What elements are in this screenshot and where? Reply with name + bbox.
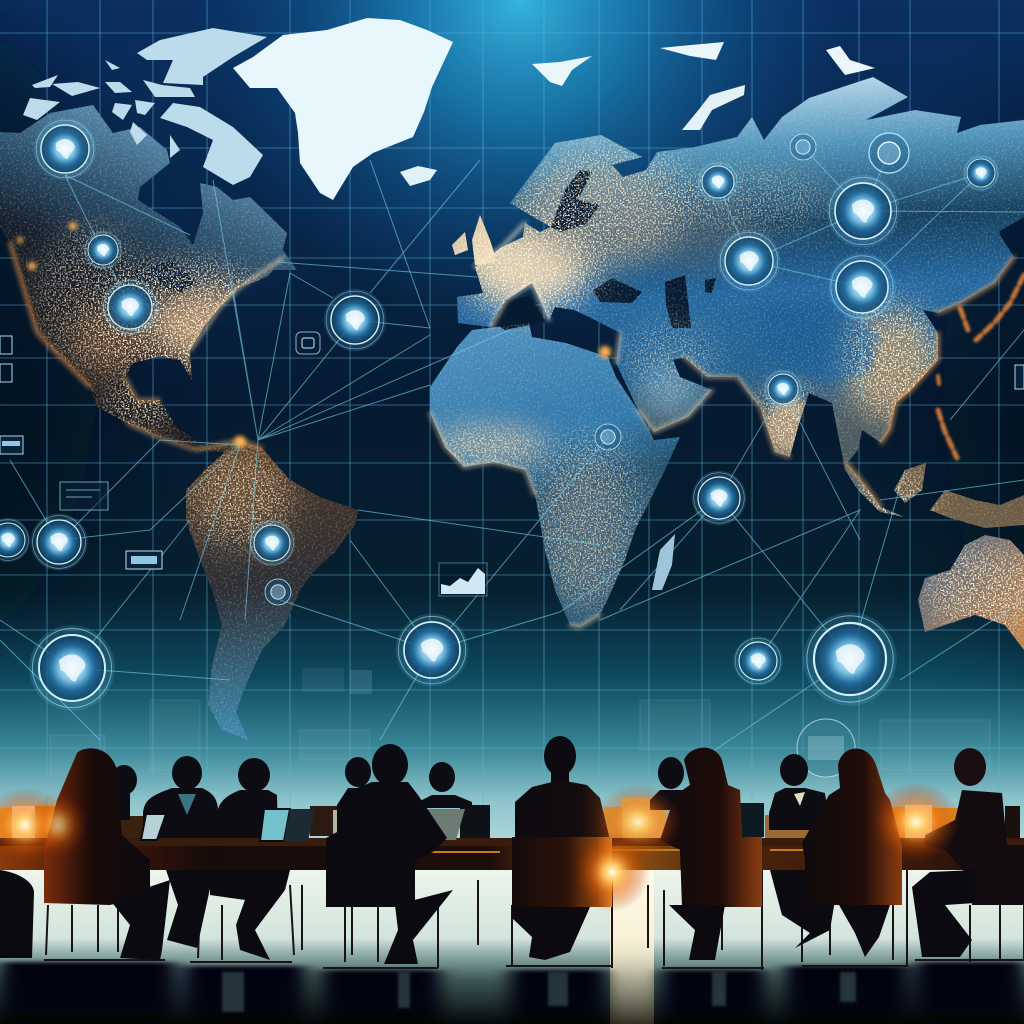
- person: woman left: [44, 748, 170, 960]
- Eurasia: [457, 77, 1024, 517]
- chair: far right pair: [802, 870, 1024, 966]
- laptop: orange folder: [176, 818, 213, 840]
- laptop: far right: [932, 808, 959, 840]
- laptop: brown right: [310, 806, 340, 836]
- Indonesia: [894, 463, 1024, 528]
- Franz Josef Land: [660, 42, 724, 60]
- laptop: right dark: [739, 803, 764, 837]
- person: man second left legs: [166, 870, 214, 948]
- table front: [0, 846, 1024, 870]
- lower wall faint diagrams: [50, 700, 990, 775]
- laptop: far left: [0, 808, 14, 841]
- glow: centre table flare: [574, 832, 650, 912]
- person: centre back large: [326, 744, 453, 964]
- laptop: tablet: [141, 814, 166, 840]
- Tibet dark blue patch: [755, 300, 880, 385]
- person: man right legs: [770, 870, 840, 948]
- node: Russia west: [697, 161, 739, 203]
- person: seated far left legs: [0, 870, 34, 958]
- node: Central Asia: [718, 230, 780, 292]
- laptop: right tan: [765, 815, 809, 840]
- node: Indian Ocean: [692, 471, 746, 525]
- glow: centre right: [594, 784, 682, 860]
- Madagascar: [652, 534, 675, 590]
- seated figures front row: [0, 736, 1024, 964]
- node: India: [764, 370, 802, 408]
- person: man far right: [912, 748, 1024, 957]
- laptop: dark centre back: [460, 805, 490, 838]
- person: facing centre: [418, 762, 472, 808]
- floor reflected streaks: [222, 972, 856, 1012]
- panel: right edge chart: [1015, 365, 1024, 389]
- Greenland: [233, 18, 453, 200]
- regional glows: [70, 160, 936, 600]
- node: lower right: [803, 612, 897, 706]
- globe nodes: [0, 118, 999, 777]
- city lights warm: [21, 135, 1024, 645]
- floor light beam: [610, 868, 654, 1024]
- person: small right back: [650, 757, 685, 810]
- glow: right: [872, 782, 960, 862]
- inland seas: [150, 170, 716, 330]
- laptop: far right dark: [1005, 806, 1020, 840]
- person: centre big back: [512, 736, 612, 960]
- network connection lines: [0, 147, 1024, 760]
- front laptop screens: [141, 809, 465, 841]
- city lights cool: [0, 78, 1024, 740]
- lit coastlines: [10, 223, 1014, 627]
- person: woman far right: [802, 748, 902, 957]
- panel: left edge chart: [0, 336, 12, 382]
- chair: right: [648, 870, 764, 970]
- person: man second left: [217, 758, 278, 840]
- person: small profile left: [110, 765, 137, 820]
- node: faint lower: [797, 719, 855, 777]
- Iceland: [400, 166, 437, 186]
- chair: far left: [44, 905, 165, 960]
- node: Canada: [84, 230, 122, 270]
- glow: far left: [0, 787, 67, 863]
- table edge highlight: [410, 850, 860, 852]
- node: Pacific: [30, 513, 88, 571]
- node: East Africa: [595, 424, 621, 450]
- table top: [0, 838, 1024, 848]
- node: Russia north: [790, 134, 816, 160]
- Severnaya Zemlya: [826, 46, 875, 75]
- node: Russia north east: [869, 133, 909, 173]
- panel: left edge bar: [0, 436, 23, 454]
- person: man suit left: [143, 756, 218, 845]
- node: USA: [101, 278, 159, 336]
- node: lower left: [29, 625, 115, 711]
- laptop: far right orange: [892, 807, 905, 840]
- laptop: centre grey: [427, 809, 465, 840]
- data panels: [0, 332, 1024, 694]
- chair: centre large: [323, 880, 478, 968]
- node: Alaska: [34, 118, 96, 180]
- laptop: left second: [35, 806, 60, 841]
- node: left edge: [0, 518, 30, 562]
- laptop: dark screen: [284, 809, 315, 841]
- panel: area chart: [439, 563, 487, 596]
- laptop: teal screen: [260, 809, 290, 841]
- Australia: [918, 535, 1024, 650]
- Japan and Korea bright coast: [938, 275, 1024, 458]
- person: man fourth legs: [210, 870, 290, 960]
- chair: centre big back: [506, 870, 612, 968]
- laptop: pale sliver: [333, 810, 346, 837]
- North America: [0, 105, 297, 452]
- Svalbard: [532, 56, 592, 86]
- laptop: gold glow: [604, 807, 622, 838]
- continents: [0, 0, 1024, 800]
- Novaya Zemlya: [682, 85, 745, 130]
- glow: left woman flare: [28, 791, 88, 859]
- Africa: [430, 323, 680, 627]
- back-lit wall and floor: [0, 868, 1024, 1024]
- panel: map inset: [296, 332, 320, 354]
- node: Far East: [963, 155, 999, 191]
- back-lighting glows: [0, 782, 960, 912]
- panel: left mini chart: [60, 482, 108, 510]
- node: China: [828, 253, 896, 321]
- node: Atlantic north: [324, 289, 386, 351]
- Mexico light hubs: [17, 222, 611, 448]
- chair: second: [190, 885, 302, 962]
- back-row laptops: [0, 798, 1020, 841]
- node: Argentina: [265, 579, 291, 605]
- laptop: far left light gap: [12, 806, 35, 841]
- British Isles: [452, 215, 497, 265]
- back row people: [110, 754, 830, 845]
- chair legs: [44, 870, 1024, 970]
- panel: small bar: [126, 551, 162, 569]
- Canadian Arctic islands: [23, 28, 267, 185]
- person: man right: [769, 754, 830, 830]
- conference table: [0, 838, 1024, 870]
- node: Brazil: [249, 520, 295, 566]
- person: woman right: [660, 748, 762, 960]
- laptop: far right bright: [905, 805, 932, 840]
- person: small centre: [337, 757, 375, 840]
- South America: [186, 440, 358, 740]
- node: Siberia: [827, 175, 899, 247]
- floor reflections: [0, 962, 1024, 1024]
- laptop: right pale: [809, 810, 822, 828]
- node: lower centre right: [733, 636, 783, 686]
- laptop: brown back: [117, 816, 173, 840]
- panel: faint lower inset: [302, 668, 372, 694]
- laptop: centre right bright: [622, 798, 666, 840]
- node: South Atlantic: [396, 614, 468, 686]
